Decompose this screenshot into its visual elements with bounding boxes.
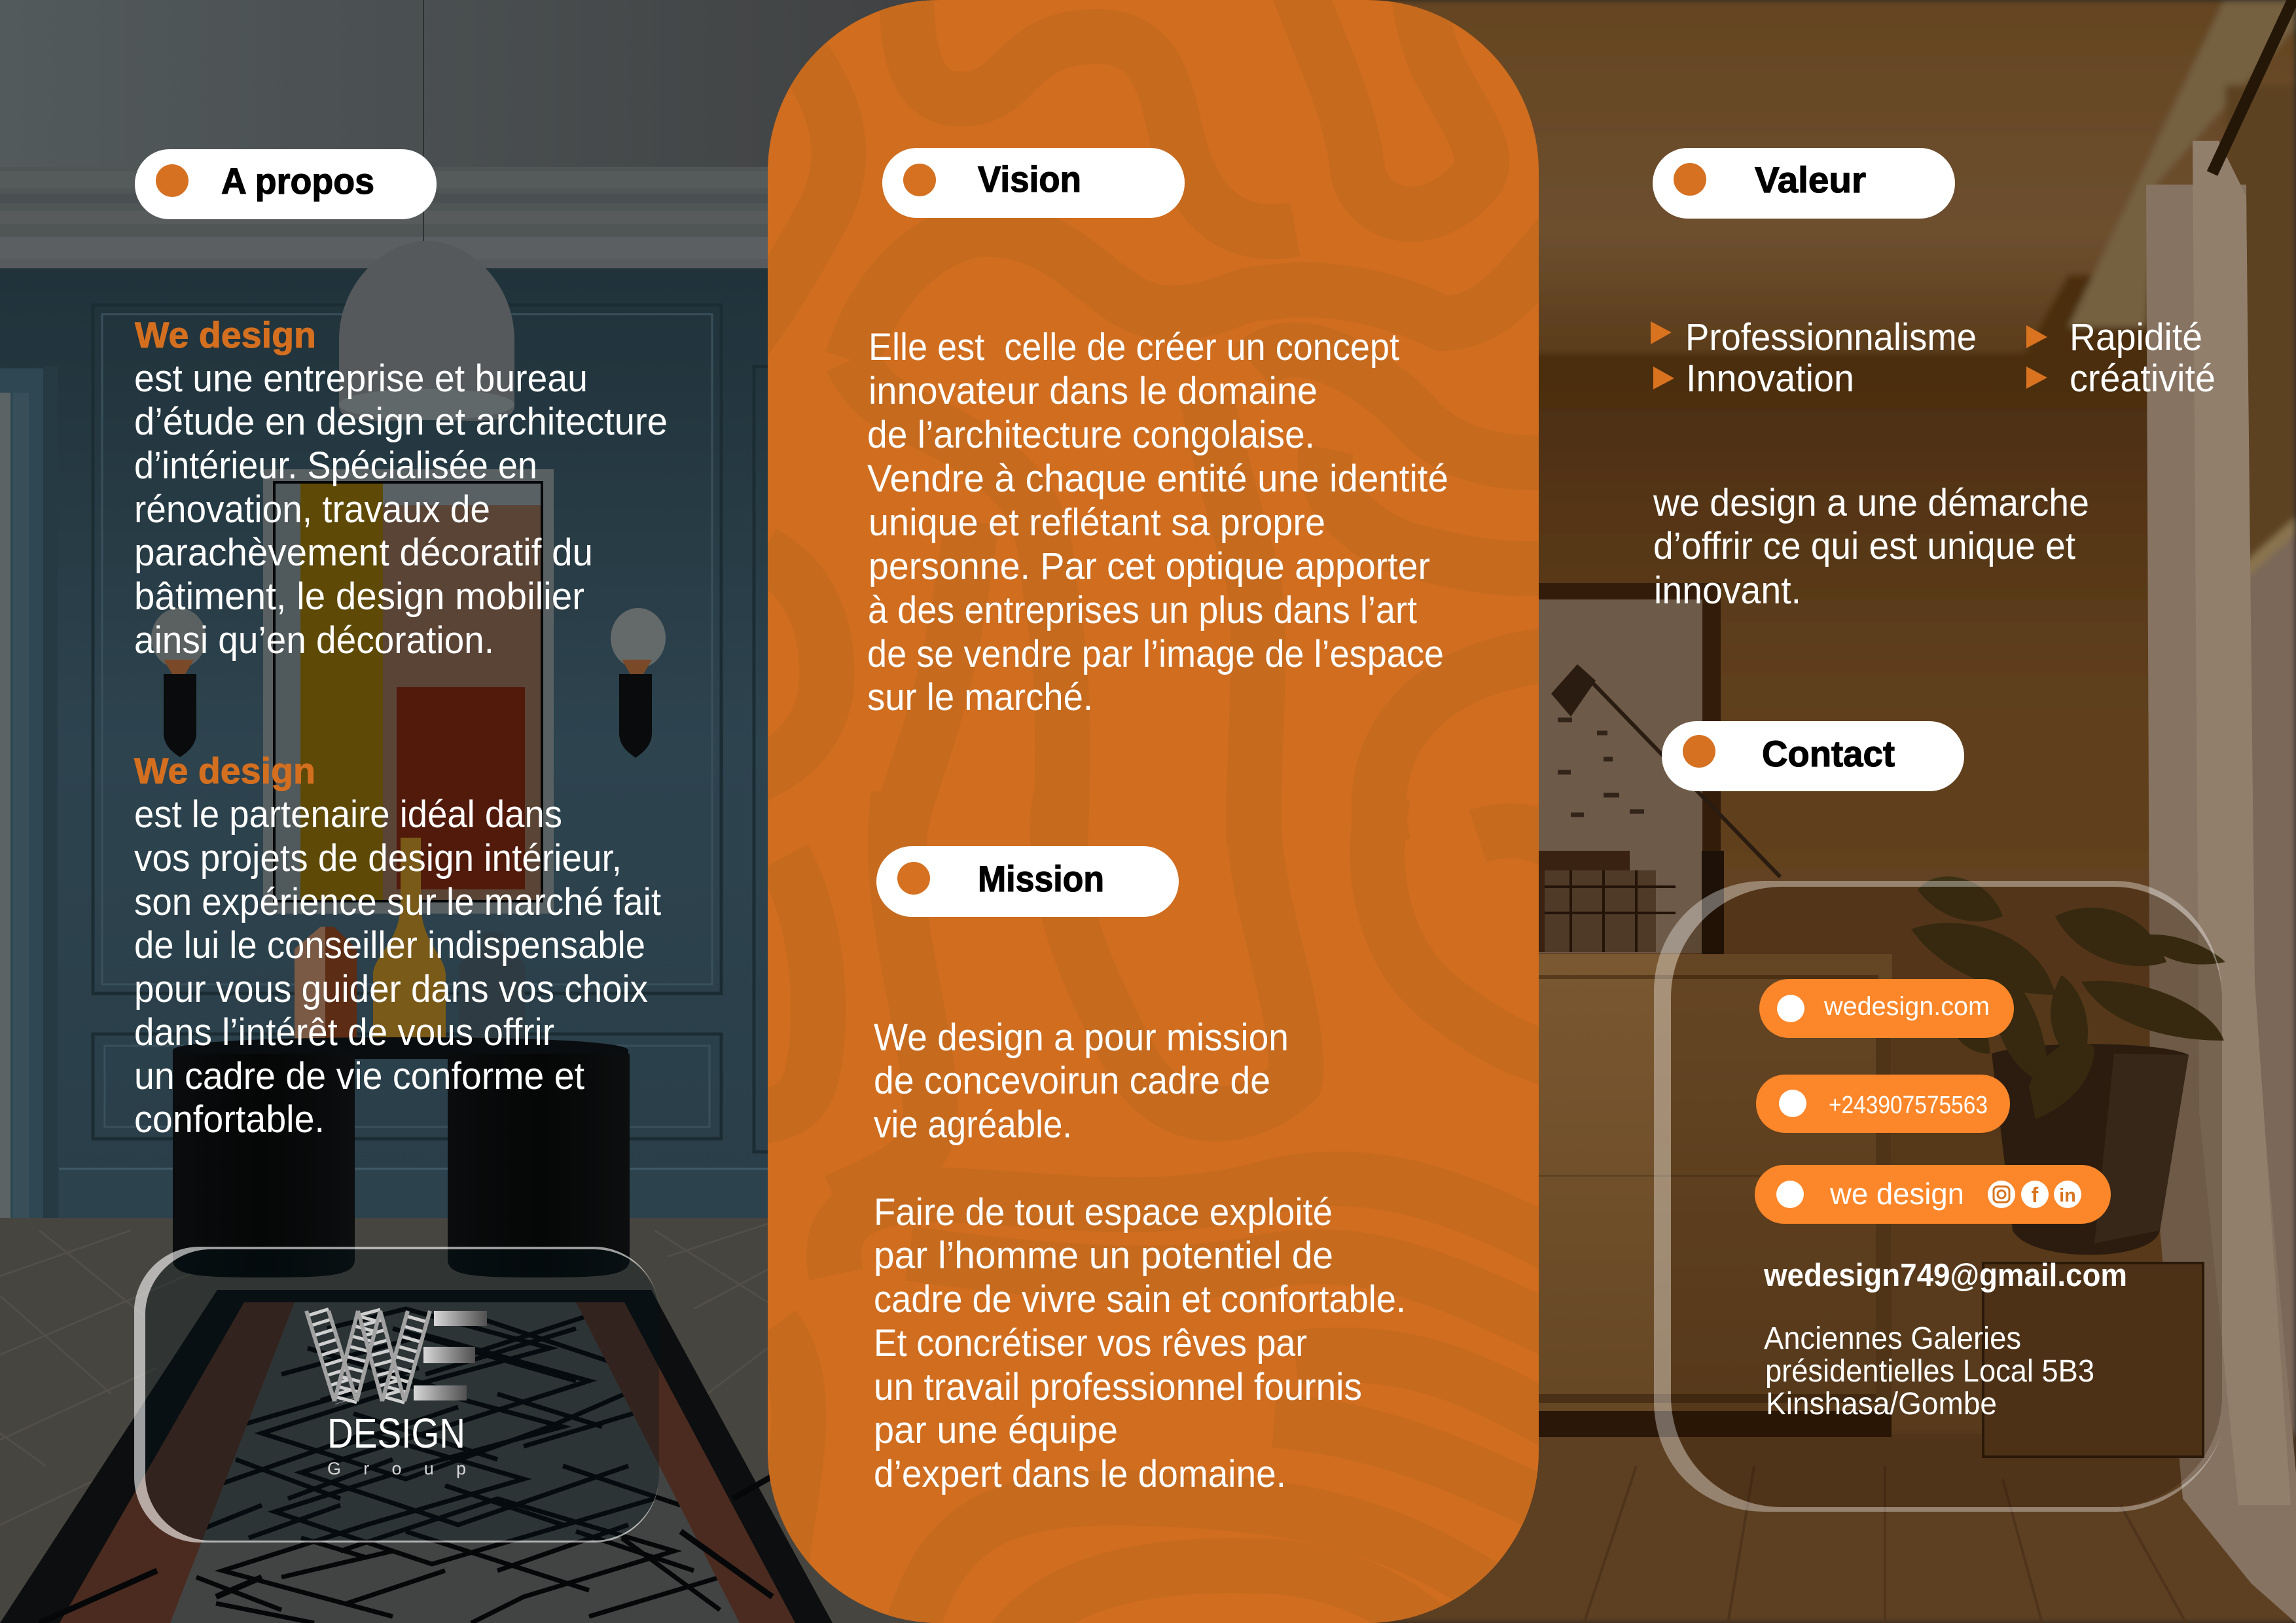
text block: vision: de se vendre par l’image de l’espace: [867, 633, 1444, 675]
glass card light edge: [134, 1247, 659, 1543]
text block: vision: [867, 326, 1448, 719]
wall mouldings: [0, 305, 982, 1218]
text block: mission: We design a pour mission: [874, 1016, 1289, 1059]
plant leaves: [1911, 876, 2225, 1119]
text block: about us first paragraph: rénovation, travaux de: [134, 488, 490, 531]
postal address: présidentielles Local 5B3: [1765, 1354, 2094, 1389]
text block: values description: [1653, 482, 2089, 612]
text block: mission: un travail professionnel fournis: [874, 1366, 1362, 1408]
heading pill: Contact: Contact: [1762, 733, 1895, 774]
panel: central orange rounded panel with wavy pattern: [732, 0, 1587, 1623]
floor boards: [1584, 1466, 2186, 1623]
contact pill: website: [1759, 979, 2014, 1038]
text block: mission: [874, 1016, 1406, 1495]
postal address: Anciennes Galeries: [1764, 1321, 2021, 1356]
text block: mission: par l’homme un potentiel de: [874, 1234, 1333, 1277]
text block: vision: innovateur dans le domaine: [869, 370, 1318, 412]
heading pill: Mission: [876, 846, 1179, 917]
heading pill: A propos: [135, 149, 437, 219]
icon: linkedin: [2054, 1181, 2081, 1208]
contact pill: phone: [1756, 1075, 2010, 1133]
text block: about us second paragraph: vos projets de design intérieur,: [134, 837, 622, 880]
text block: mission: par une équipe: [874, 1409, 1118, 1452]
ceiling: [0, 0, 982, 170]
icon: instagram: [1988, 1181, 2015, 1208]
text block: vision: Vendre à chaque entité une identité: [867, 457, 1448, 500]
text block: mission: cadre de vivre sain et confortable.: [874, 1278, 1406, 1321]
postal address: Kinshasa/Gombe: [1766, 1387, 1997, 1421]
text block: about us first paragraph: We design: [135, 314, 316, 355]
icon: facebook: [2021, 1181, 2049, 1208]
dark alcove: [2003, 275, 2153, 393]
contact pill: social media: [1755, 1165, 2111, 1224]
glass card with logo: [134, 1247, 659, 1543]
text block: mission: Faire de tout espace exploité: [874, 1191, 1333, 1234]
list: values with arrow bullets: Rapidité: [2070, 316, 2202, 359]
text block: mission: d’expert dans le domaine.: [874, 1453, 1286, 1495]
text block: mission: de concevoirun cadre de: [874, 1060, 1270, 1102]
text block: about us first paragraph: [134, 314, 668, 662]
text block: about us second paragraph: son expérience sur le marché fait: [134, 881, 661, 923]
text block: values description: we design a une démarche: [1653, 482, 2089, 524]
icon: linkedin: in: [2059, 1185, 2076, 1206]
heading pill: Valeur: Valeur: [1755, 159, 1866, 200]
contact pill: social media: we design: [1829, 1177, 1964, 1211]
heading pill: Mission: Mission: [978, 858, 1104, 899]
wall: [0, 268, 982, 1218]
email address: wedesign749@gmail.com: [1763, 1258, 2127, 1293]
text block: about us second paragraph: de lui le conseiller indispensable: [134, 924, 645, 967]
text block: about us second paragraph: pour vous guider dans vos choix: [134, 968, 648, 1010]
wavy pattern: [732, 0, 1587, 1623]
text block: vision: personne. Par cet optique apporter: [869, 545, 1430, 588]
text block: about us first paragraph: d’étude en design et architecture: [134, 401, 668, 443]
soft blurred photo layer: architecture: [1244, 0, 2296, 1623]
text block: about us first paragraph: parachèvement décoratif du: [134, 531, 593, 574]
text block: vision: sur le marché.: [867, 676, 1093, 719]
right wall behind curtain: [2225, 85, 2296, 1505]
painting: [263, 469, 554, 914]
heading pill: Contact: [1662, 721, 1964, 791]
arrow bullets: [1651, 321, 2047, 389]
sloped ceiling: [2068, 0, 2296, 327]
panel: contact glass card: [1654, 881, 2222, 1512]
text block: vision: à des entreprises un plus dans l’art: [868, 589, 1417, 632]
wall sconces: [151, 608, 666, 758]
wooden floor: [1244, 1433, 2296, 1623]
text block: mission: vie agréable.: [874, 1103, 1072, 1146]
list: values with arrow bullets: Innovation: [1686, 357, 1854, 400]
text block: about us second paragraph: est le partenaire idéal dans: [134, 793, 562, 836]
wall: [1244, 353, 2225, 1466]
sideboard with baskets: [1505, 851, 1892, 1437]
contact pill: phone: +243907575563: [1829, 1092, 1988, 1119]
text block: vision: Elle est celle de créer un concept: [869, 326, 1399, 368]
text block: about us first paragraph: ainsi qu’en décoration.: [134, 619, 494, 662]
text block: vision: unique et reflétant sa propre: [869, 501, 1325, 544]
text block: about us second paragraph: dans l’intérêt de vous offrir: [134, 1011, 554, 1054]
curtain rod: [2212, 0, 2296, 173]
contact pill: website: wedesign.com: [1823, 992, 1990, 1021]
text block: about us second paragraph: un cadre de vie conforme et: [134, 1055, 584, 1097]
text block: mission: Et concrétiser vos rêves par: [874, 1322, 1307, 1364]
cornice: [0, 167, 982, 268]
vases: [295, 838, 525, 1047]
list: values with arrow bullets: [1651, 316, 2215, 400]
pendant lamp: [339, 0, 514, 421]
text block: vision: de l’architecture congolaise.: [867, 414, 1315, 456]
patterned rug: [0, 1290, 833, 1623]
heading pill: Vision: Vision: [978, 158, 1081, 200]
glass card surface: [145, 1249, 659, 1541]
text block: values description: d’offrir ce qui est unique et: [1653, 525, 2075, 567]
background photo: warm brown interior room: [1244, 0, 2296, 1623]
text block: about us second paragraph: confortable.: [134, 1098, 325, 1141]
text block: about us first paragraph: est une entreprise et bureau: [134, 357, 588, 400]
postal address: [1764, 1321, 2094, 1421]
glass card surface: [1671, 887, 2222, 1507]
plant stand and pot: [1983, 1044, 2203, 1457]
background photo: dark teal interior room: [0, 0, 982, 1623]
text block: about us first paragraph: bâtiment, le design mobilier: [134, 575, 584, 618]
curtain: [2146, 141, 2296, 1623]
logo wordmark Group: Group: [327, 1459, 466, 1478]
text block: about us second paragraph: [134, 750, 661, 1141]
framed picture and lamp: [1505, 583, 1780, 953]
list: values with arrow bullets: créativité: [2070, 357, 2215, 400]
text block: about us first paragraph: d’intérieur. Spécialisée en: [134, 444, 537, 487]
heading pill: A propos: A propos: [221, 160, 374, 202]
icon: facebook: f: [2032, 1183, 2039, 1207]
ceiling: [1244, 0, 2296, 357]
text block: about us second paragraph: We design: [134, 750, 315, 791]
heading pill: Valeur: [1653, 148, 1955, 219]
logo: ladders and rulers WE mark: [306, 1311, 487, 1401]
text block: values description: innovant.: [1654, 569, 1801, 612]
black side tables: [173, 1037, 630, 1277]
logo wordmark DESIGN: DESIGN: [327, 1410, 465, 1457]
list: values with arrow bullets: Professionnalisme: [1685, 316, 1977, 359]
heading pill: Vision: [882, 148, 1185, 218]
floor: [0, 1218, 982, 1623]
glass card light edge: [1654, 881, 2222, 1512]
